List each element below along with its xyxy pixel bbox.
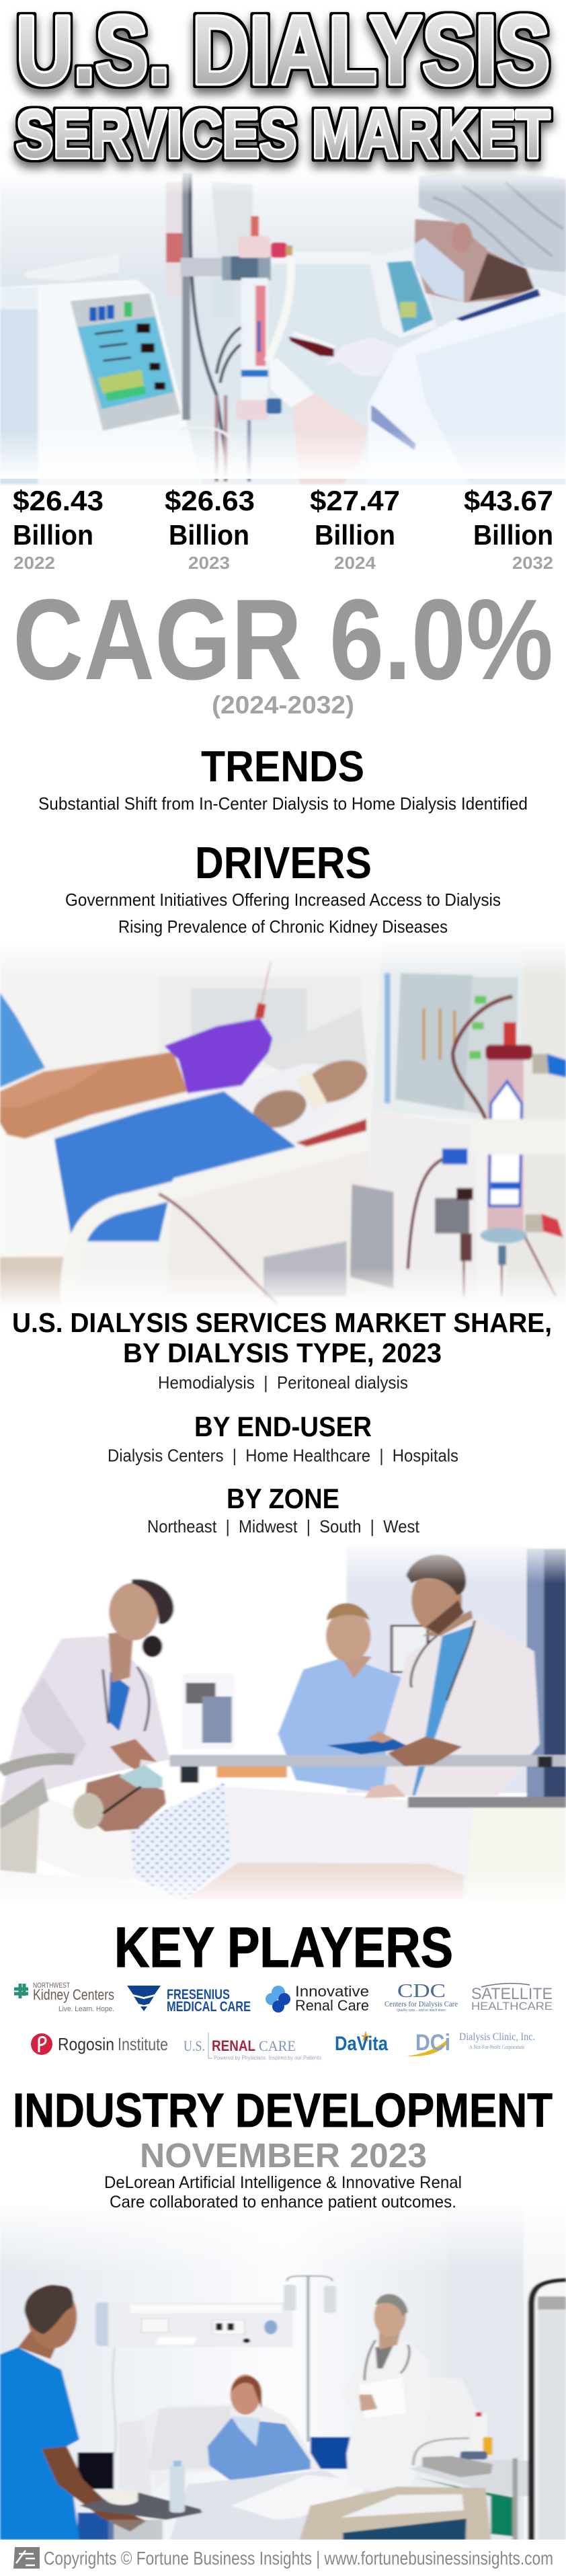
- logo: Rogosin Institute: Rogosin: [58, 2034, 114, 2054]
- key players heading: KEY PLAYERS: [114, 1916, 453, 1979]
- logo: Satellite Healthcare: [471, 1984, 553, 2013]
- logo: Dialysis Clinic, Inc.: DCi: [415, 2030, 450, 2056]
- logo: Innovative Renal Care: Innovative: [295, 1983, 369, 2000]
- logo: CDC Centers for Dialysis Care: Quality care... and so much more.: [397, 2008, 446, 2013]
- market values by year: 2032: [512, 553, 553, 573]
- drivers text: Government Initiatives Offering Increased Access to Dialysis: [65, 890, 501, 910]
- footer: [0, 2540, 566, 2576]
- fade: photo one bottom: [0, 430, 566, 479]
- logo: Rogosin Institute: Institute: [118, 2034, 168, 2054]
- photo: doctors around patient in bed: [0, 1536, 566, 1909]
- end-user list: Dialysis Centers | Home Healthcare | Hospitals: [108, 1446, 458, 1466]
- logo: Fresenius Medical Care: FRESENIUS: [167, 1987, 230, 2002]
- logo: CDC Centers for Dialysis Care: Centers for Dialysis Care: [385, 1999, 458, 2008]
- logo: U.S. Renal Care: CARE: [259, 2037, 296, 2054]
- drivers text: Rising Prevalence of Chronic Kidney Diseases: [118, 916, 448, 937]
- fade: photo three bottom: [0, 1869, 566, 1911]
- photo: gloved hand and patient on dialysis: [0, 939, 566, 1306]
- segmentation heading: [12, 1307, 552, 1368]
- development date: NOVEMBER 2023: [140, 2136, 427, 2175]
- logo: Rogosin Institute: [31, 2033, 168, 2055]
- market values by year: 2023: [188, 553, 230, 573]
- logo: U.S. Renal Care: Powered by Physicians. Inspired by our Patients: [214, 2055, 321, 2061]
- logo: CDC Centers for Dialysis Care: CDC: [397, 1980, 446, 2002]
- logo: Satellite Healthcare: HEALTHCARE: [471, 2000, 553, 2013]
- fade: photo one edges: [0, 168, 566, 195]
- logo: U.S. Renal Care: [184, 2033, 321, 2061]
- logo: Innovative Renal Care: Renal Care: [295, 1997, 369, 2014]
- logo: Northwest Kidney Centers: Kidney Centers: [33, 1986, 114, 2003]
- photo: technician with dialysis machine: [0, 168, 566, 485]
- market values by year: Billion: [13, 519, 93, 551]
- CAGR period: (2024-2032): [212, 691, 354, 719]
- market values by year: $26.63: [165, 485, 255, 516]
- fade: photo three top and right: [0, 1536, 566, 1584]
- logo: Dialysis Clinic, Inc.: A Not-For-Profit Corporation: [469, 2044, 524, 2050]
- fade: photo two bottom: [0, 1267, 566, 1308]
- market values by year: $43.67: [464, 485, 553, 516]
- segmentation heading: U.S. DIALYSIS SERVICES MARKET SHARE,: [12, 1307, 552, 1338]
- market values by year: 2022: [13, 553, 55, 573]
- zone heading: BY ZONE: [227, 1483, 339, 1514]
- fade: photo two top: [0, 939, 566, 976]
- market values by year: [13, 485, 553, 573]
- dialysis types: Hemodialysis | Peritoneal dialysis: [158, 1372, 408, 1393]
- development text: DeLorean Artificial Intelligence & Innovative Renal: [104, 2173, 462, 2192]
- logo: Dialysis Clinic, Inc.: [406, 2030, 535, 2056]
- drivers heading: DRIVERS: [195, 838, 372, 888]
- fade: photo four top: [0, 2199, 566, 2273]
- drivers text: [65, 890, 501, 937]
- end-user heading: BY END-USER: [194, 1411, 372, 1442]
- market values by year: Billion: [315, 519, 395, 551]
- icon: Fortune Business Insights logo: [13, 2547, 40, 2569]
- logo: Northwest Kidney Centers: [14, 1982, 114, 2013]
- segmentation heading: BY DIALYSIS TYPE, 2023: [123, 1337, 442, 1368]
- photo: patient with nurse and doctor: [0, 2199, 566, 2540]
- zone list: Northeast | Midwest | South | West: [147, 1516, 420, 1536]
- trends heading: TRENDS: [201, 742, 364, 791]
- logo: U.S. Renal Care: U.S.: [184, 2037, 205, 2054]
- market values by year: $26.43: [13, 485, 104, 516]
- logo: Dialysis Clinic, Inc.: Dialysis Clinic, Inc.: [459, 2031, 535, 2043]
- logo: Innovative Renal Care: [266, 1983, 369, 2014]
- title: [16, 0, 550, 172]
- market values by year: Billion: [169, 519, 249, 551]
- logo: U.S. Renal Care: RENAL: [212, 2037, 255, 2054]
- logo: Northwest Kidney Centers: Live. Learn. Hope.: [58, 2005, 114, 2013]
- market values by year: Billion: [473, 519, 553, 551]
- market values by year: 2024: [334, 553, 376, 573]
- logo: Fresenius Medical Care: [127, 1986, 251, 2015]
- development text: [104, 2173, 462, 2212]
- trends text: Substantial Shift from In-Center Dialysis to Home Dialysis Identified: [38, 793, 528, 814]
- development text: Care collaborated to enhance patient outcomes.: [110, 2193, 456, 2212]
- logo: Fresenius Medical Care: MEDICAL CARE: [167, 1999, 251, 2015]
- market values by year: $27.47: [310, 485, 400, 516]
- logo: DaVita: DaVita: [335, 2033, 388, 2055]
- logo: Satellite Healthcare: SATELLITE: [471, 1985, 553, 2003]
- logo: CDC Centers for Dialysis Care: [385, 1980, 458, 2013]
- logo: Northwest Kidney Centers: NORTHWEST: [33, 1982, 70, 1990]
